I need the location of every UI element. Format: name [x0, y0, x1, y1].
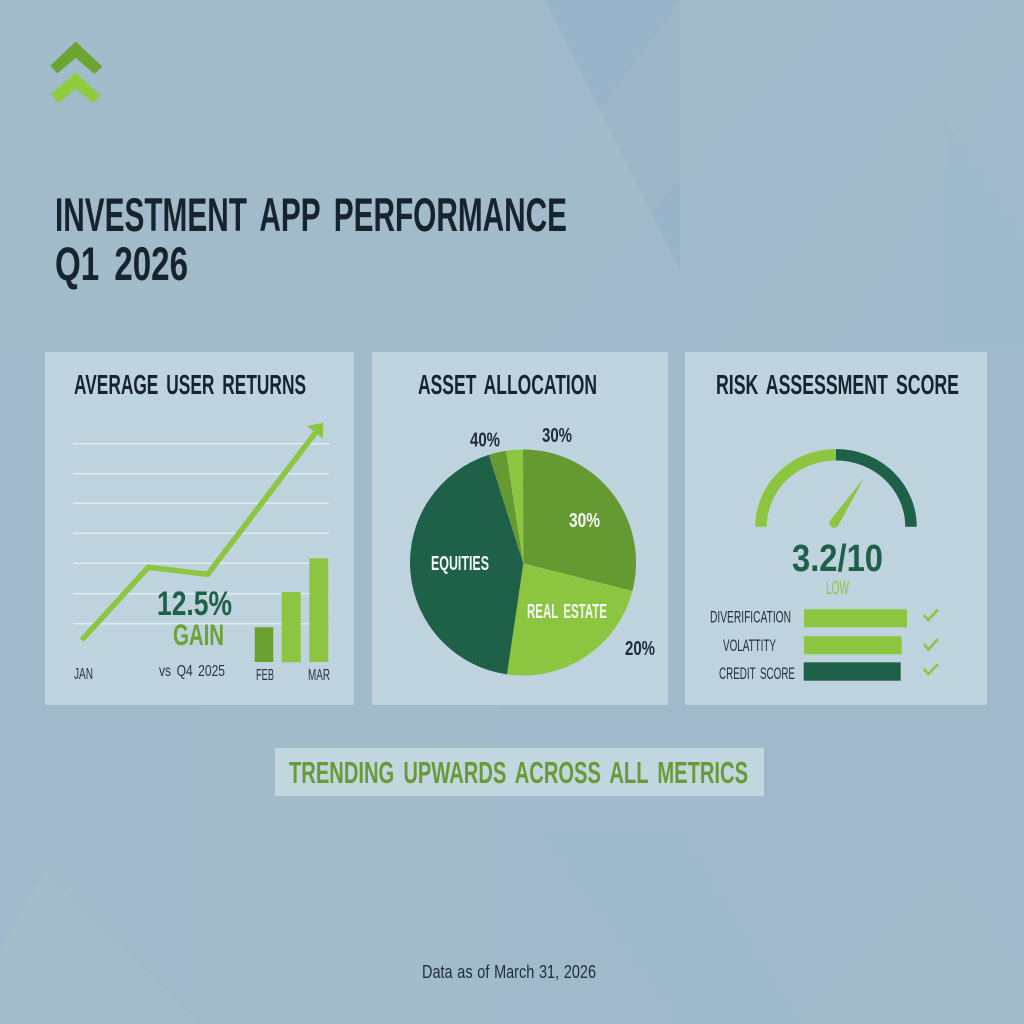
score rating: LOW [826, 578, 849, 598]
bar chart: monthly bars [255, 558, 328, 662]
metric row: diversification: DIVERIFICATION [710, 608, 791, 627]
big stat: 12.5% gain: GAIN [173, 619, 224, 652]
title [55, 188, 567, 290]
pie labels [431, 425, 655, 660]
metric row: credit score [719, 662, 938, 683]
comparison note: vs Q4 2025 [159, 663, 225, 680]
pie labels: EQUITIES [431, 553, 489, 575]
metric row: volatility: VOLATTITY [723, 636, 776, 655]
panel heading: average user returns: AVERAGE USER RETURNS [74, 369, 306, 400]
pie labels: 20% [625, 638, 655, 660]
big stat: 12.5% gain [157, 585, 232, 652]
pie chart [410, 450, 636, 676]
pie labels: 30% [542, 425, 572, 447]
pie labels: REAL ESTATE [527, 601, 607, 623]
axis labels: JAN [74, 666, 93, 683]
line chart arrow: rising returns [82, 423, 323, 640]
big stat: 12.5% gain: 12.5% [157, 585, 232, 623]
callout banner: TRENDING UPWARDS ACROSS ALL METRICS [289, 755, 748, 790]
axis labels: FEB [256, 667, 274, 684]
axis labels: MAR [308, 667, 330, 684]
gauge [761, 455, 911, 528]
axis labels [74, 666, 330, 684]
panel: asset allocation [372, 352, 668, 705]
icon: double chevron logo [51, 42, 102, 103]
panel: average user returns [45, 352, 354, 705]
score value: 3.2/10 [792, 538, 883, 580]
title: Q1 2026 [55, 237, 188, 290]
metric row: diversification [710, 608, 938, 627]
callout banner [275, 748, 764, 796]
metric row: credit score: CREDIT SCORE [719, 664, 795, 683]
title: INVESTMENT APP PERFORMANCE [55, 188, 567, 241]
panel: risk assessment score [685, 352, 987, 705]
footer note: Data as of March 31, 2026 [422, 962, 596, 982]
pie labels: 30% [569, 510, 600, 532]
panel heading: asset allocation: ASSET ALLOCATION [418, 369, 597, 400]
pie labels: 40% [470, 430, 500, 452]
metric row: volatility [723, 636, 938, 655]
